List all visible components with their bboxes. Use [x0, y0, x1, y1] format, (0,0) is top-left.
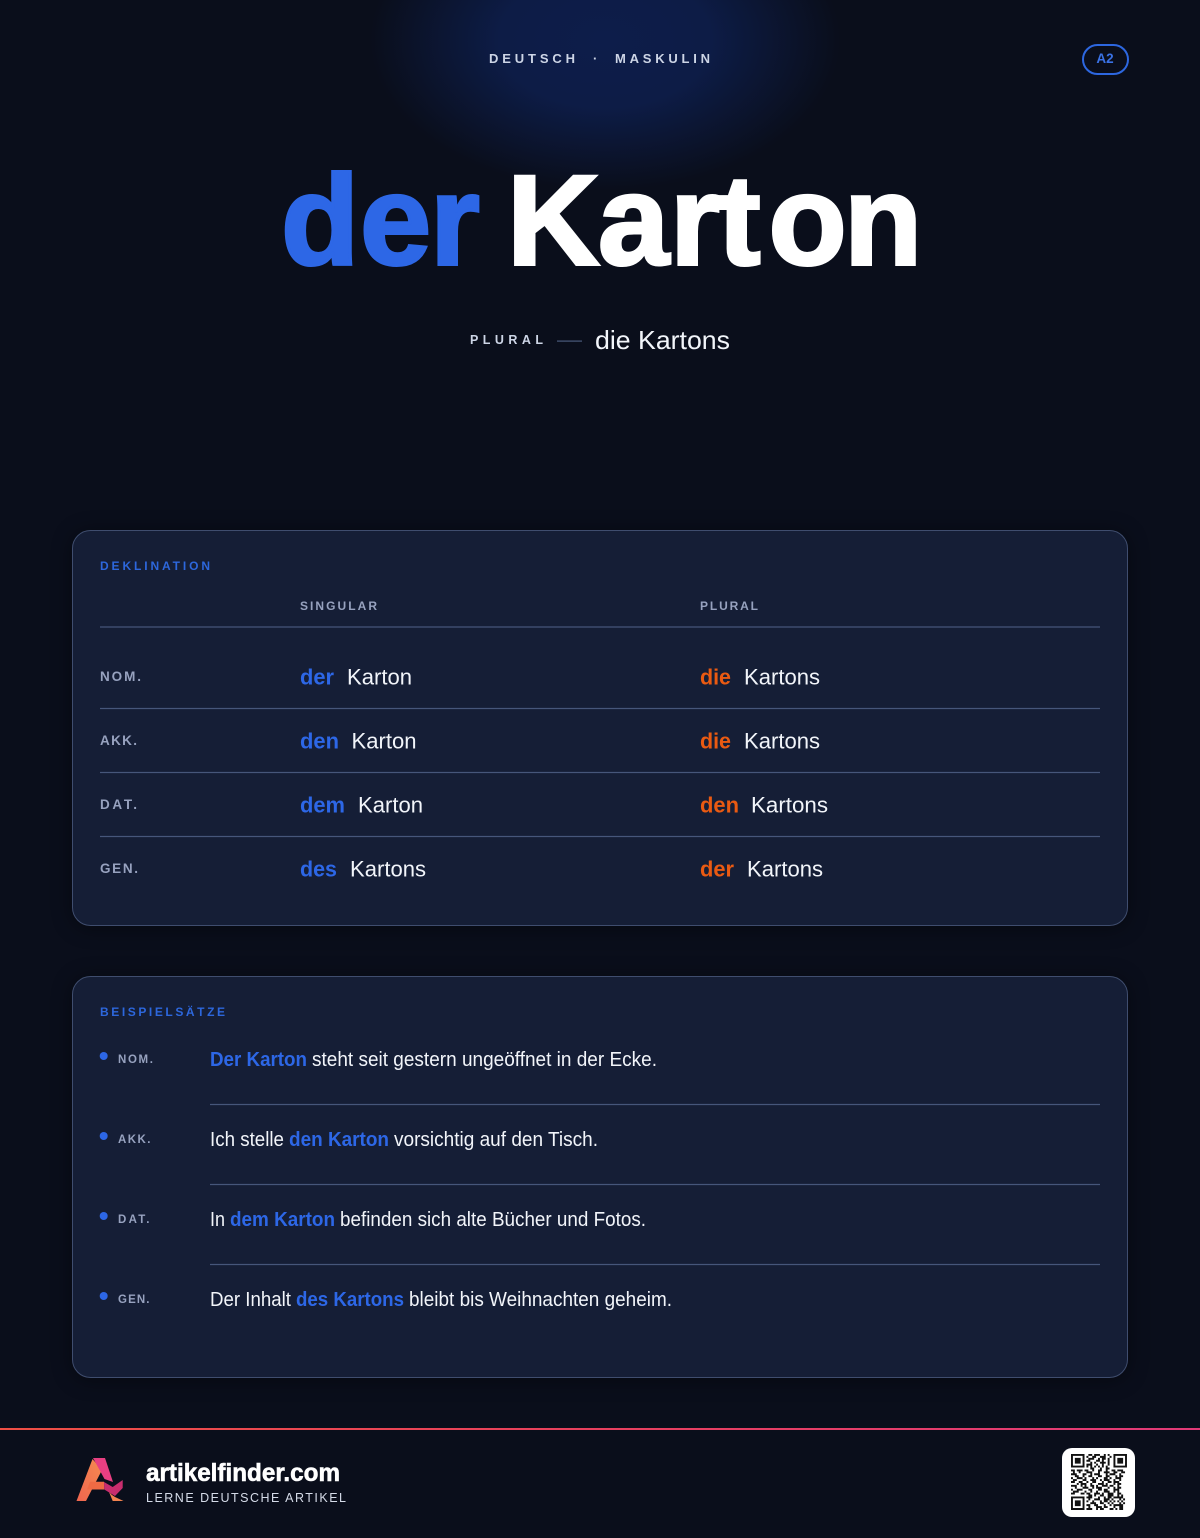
QR code: [1062, 1448, 1135, 1517]
header label: MASKULIN: [615, 51, 710, 66]
row: accusative: die: [700, 728, 731, 754]
example: dative: DAT.: [118, 1214, 150, 1226]
background glow: [340, 0, 870, 200]
column headings: SINGULAR: [300, 599, 377, 613]
row: accusative: [100, 728, 820, 754]
brand text: artikelfinder.com: [146, 1459, 340, 1487]
row: dative: Kartons: [751, 792, 828, 818]
column headings: PLURAL: [700, 599, 758, 613]
icon: artikelfinder logo: [76, 1458, 124, 1501]
title: Karton: [507, 150, 922, 292]
row: nominative: Kartons: [744, 664, 820, 690]
brand text: [146, 1459, 346, 1505]
example: genitive: GEN.: [118, 1294, 150, 1306]
row: genitive: GEN.: [100, 861, 138, 876]
plural line: PLURAL: [470, 333, 543, 347]
row: genitive: des: [300, 856, 337, 882]
plural line: [470, 325, 730, 355]
header label: DEUTSCH: [489, 51, 575, 66]
example: accusative: Ich stelle: [210, 1129, 284, 1151]
example: dative: dem Karton: [230, 1209, 335, 1231]
row: dative: den: [700, 792, 739, 818]
example: accusative: AKK.: [118, 1134, 150, 1146]
example: nominative: [100, 1049, 657, 1071]
panel heading: Beispielsätze: BEISPIELSÄTZE: [100, 1004, 225, 1019]
example: genitive: [100, 1289, 672, 1311]
title: der: [281, 150, 480, 292]
example: accusative: vorsichtig auf den Tisch.: [394, 1129, 598, 1151]
panel heading: Deklination: DEKLINATION: [100, 559, 210, 573]
row: genitive: der: [700, 856, 734, 882]
example: dative: In: [210, 1209, 225, 1231]
row: dative: DAT.: [100, 797, 137, 812]
title: [281, 150, 922, 292]
example: nominative: steht seit gestern ungeöffnet in der Ecke.: [312, 1049, 657, 1071]
row: nominative: [100, 664, 820, 690]
plural line: die Kartons: [595, 325, 730, 355]
example: nominative: NOM.: [118, 1054, 153, 1066]
row: dative: [100, 792, 828, 818]
row: nominative: die: [700, 664, 731, 690]
brand text: LERNE DEUTSCHE ARTIKEL: [146, 1491, 346, 1505]
row: accusative: AKK.: [100, 733, 137, 748]
row: nominative: Karton: [347, 664, 412, 690]
row: genitive: Kartons: [747, 856, 823, 882]
level badge: [1083, 45, 1128, 74]
row: genitive: Kartons: [350, 856, 426, 882]
row: nominative: der: [300, 664, 334, 690]
row: accusative: Karton: [352, 728, 416, 754]
example: nominative: Der Karton: [210, 1049, 307, 1071]
header label: ·: [593, 51, 597, 66]
example: accusative: [100, 1129, 598, 1151]
example: accusative: den Karton: [289, 1129, 389, 1151]
column headings: [300, 599, 758, 613]
example: genitive: bleibt bis Weihnachten geheim.: [409, 1289, 672, 1311]
row: dative: Karton: [358, 792, 423, 818]
row: genitive: [100, 856, 823, 882]
row: dative: dem: [300, 792, 345, 818]
row: accusative: Kartons: [744, 728, 820, 754]
panel: declension: [72, 530, 1128, 926]
level badge: A2: [1096, 51, 1114, 66]
example: genitive: Der Inhalt: [210, 1289, 291, 1311]
example: genitive: des Kartons: [296, 1289, 404, 1311]
example: dative: [100, 1209, 646, 1231]
row: nominative: NOM.: [100, 669, 141, 684]
example: dative: befinden sich alte Bücher und Fotos.: [340, 1209, 646, 1231]
header label: [489, 51, 710, 66]
row: accusative: den: [300, 728, 339, 754]
panel: example sentences: [72, 976, 1128, 1378]
